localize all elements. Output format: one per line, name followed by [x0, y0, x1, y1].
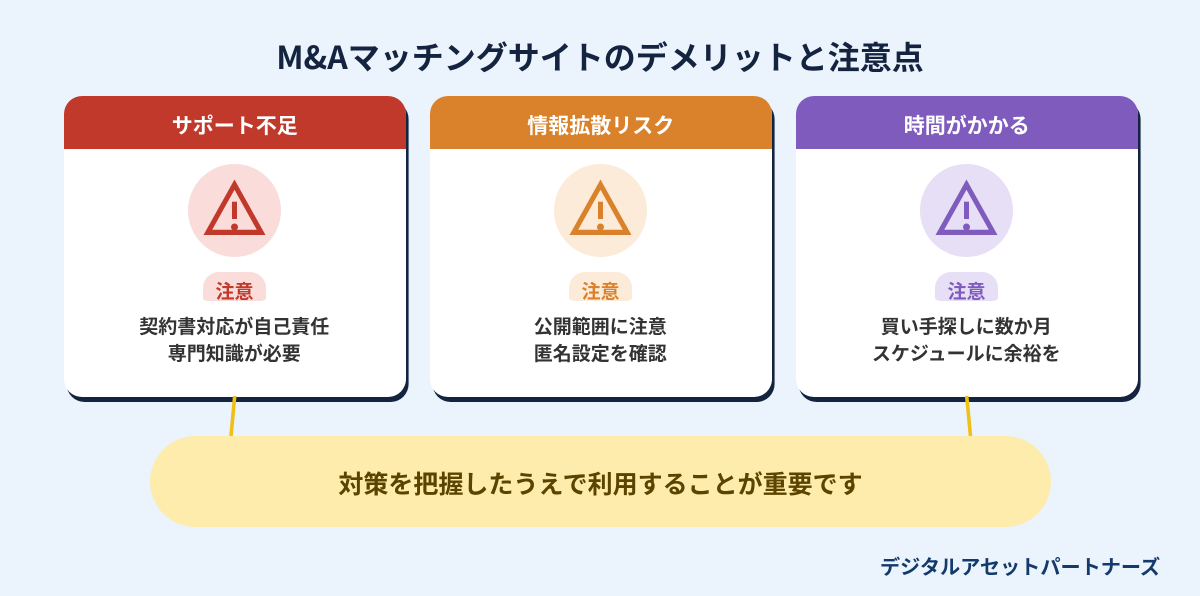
- panel: support shortage: [64, 96, 406, 397]
- icon: warning triangle purple: [920, 164, 1013, 257]
- connector: right card to pill: [964, 396, 972, 436]
- card text: [139, 312, 329, 366]
- badge: caution: [935, 272, 998, 301]
- card heading: support shortage: サポート不足: [172, 110, 298, 140]
- card text: 公開範囲に注意: [534, 312, 667, 339]
- badge: caution: [569, 272, 632, 301]
- card heading: information leak risk: [430, 96, 772, 149]
- card text: スケジュールに余裕を: [872, 339, 1061, 366]
- panel: takes time: [796, 96, 1138, 397]
- panel: information leak risk: [430, 96, 772, 397]
- card text: 契約書対応が自己責任: [139, 312, 329, 339]
- title: M&Aマッチングサイトのデメリットと注意点: [276, 33, 924, 79]
- card heading: takes time: 時間がかかる: [904, 110, 1030, 140]
- connector: left card to pill: [229, 396, 236, 436]
- icon: warning triangle red: [188, 164, 281, 257]
- card text: 買い手探しに数か月: [881, 312, 1052, 339]
- card text: [534, 312, 667, 366]
- card heading: support shortage: [64, 96, 406, 149]
- brand name: デジタルアセットパートナーズ: [880, 551, 1160, 580]
- icon: warning triangle orange: [554, 164, 647, 257]
- card heading: takes time: [796, 96, 1138, 149]
- card heading: information leak risk: 情報拡散リスク: [527, 110, 674, 140]
- badge: caution: [203, 272, 266, 301]
- card text: [872, 312, 1061, 366]
- callout: conclusion: 対策を把握したうえで利用することが重要です: [338, 465, 863, 501]
- callout: conclusion: [150, 436, 1051, 527]
- card text: 匿名設定を確認: [534, 339, 667, 366]
- card text: 専門知識が必要: [168, 339, 301, 366]
